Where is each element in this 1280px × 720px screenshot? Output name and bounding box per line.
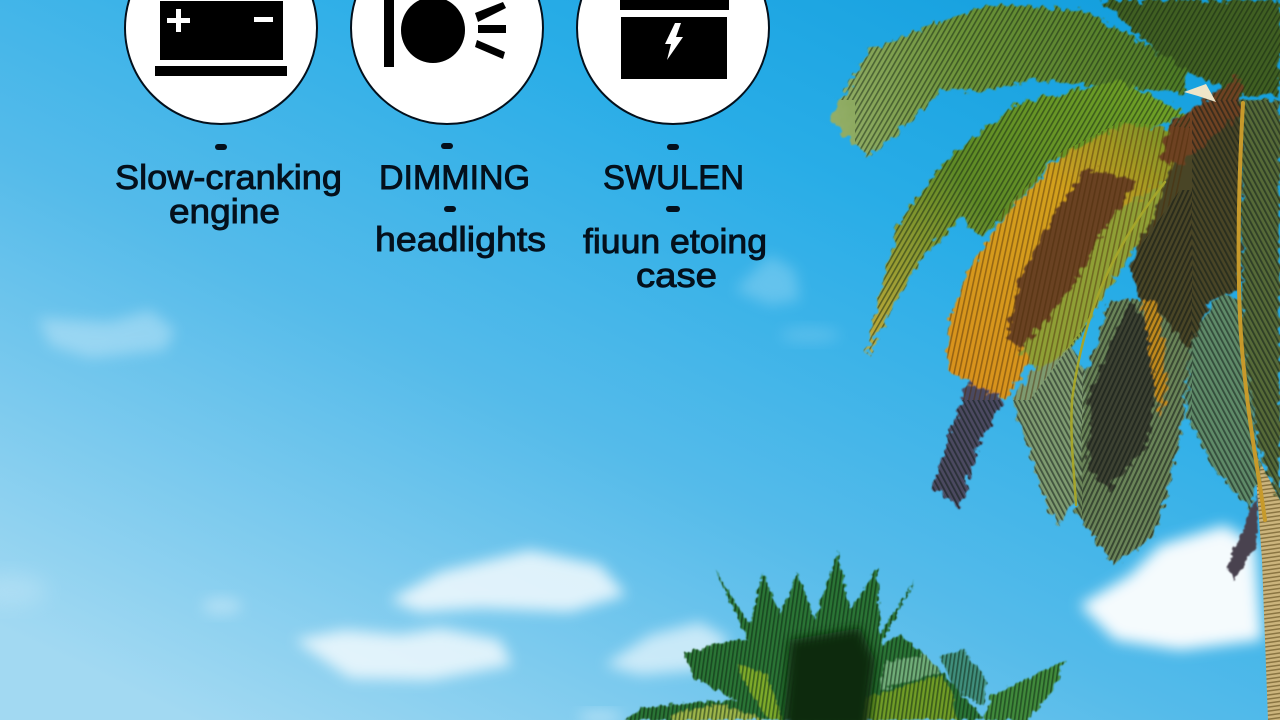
clouds bbox=[0, 255, 1262, 720]
crown stem bbox=[1160, 75, 1240, 165]
label bbox=[583, 223, 767, 295]
symptom: slow-cranking engine bbox=[115, 0, 342, 231]
bullet bbox=[215, 144, 227, 150]
frond: lower lobe A bbox=[1012, 330, 1085, 524]
frond: yellow rib in lower lobe bbox=[1142, 300, 1168, 420]
label: case bbox=[636, 257, 717, 295]
frond: dark drooping bbox=[933, 380, 1002, 509]
small palm textures bbox=[620, 550, 1070, 720]
palm trunk bbox=[1254, 450, 1280, 720]
frond: lower lobe B bbox=[1077, 300, 1190, 566]
palm tree: small, bottom bbox=[625, 553, 1065, 720]
small palm: lime leaf left bbox=[737, 665, 783, 720]
symptom: dimming headlights bbox=[351, 0, 546, 259]
label: headlights bbox=[375, 221, 546, 259]
frond: crown highlight bbox=[1184, 84, 1216, 102]
palm details bbox=[1071, 103, 1265, 520]
main spine bbox=[1239, 103, 1265, 520]
frond: crown bbox=[1100, 0, 1280, 95]
icon: battery in circle bbox=[125, 0, 317, 124]
label: fiuun etoing bbox=[583, 223, 767, 261]
frond: dark centre mass bbox=[1130, 100, 1243, 350]
bullet bbox=[667, 144, 679, 150]
icon: headlight in circle bbox=[351, 0, 543, 124]
frond: right of spine bbox=[1242, 100, 1280, 500]
bullet bbox=[666, 206, 680, 212]
label: engine bbox=[169, 193, 280, 231]
palm fronds: large palm bbox=[829, 0, 1280, 566]
yellow-green midrib bbox=[1071, 182, 1165, 505]
label: SWULEN bbox=[603, 159, 744, 197]
bullet bbox=[441, 143, 453, 149]
frond: second green bbox=[867, 80, 1187, 356]
label bbox=[115, 159, 342, 231]
frond: right lower dark tip bbox=[1227, 494, 1257, 582]
small palm: sky-lit leaf bbox=[880, 655, 940, 690]
frond: yellow-green front bbox=[1020, 178, 1167, 372]
icon: swollen battery in circle bbox=[577, 0, 769, 124]
frond: lower lobe dark heart bbox=[1088, 300, 1160, 490]
palm frond textures bbox=[820, 0, 1280, 570]
frond: yellow bbox=[947, 126, 1183, 398]
small palm: right frond bbox=[985, 660, 1065, 720]
symptom: swollen battery case bbox=[577, 0, 769, 295]
small palm: upright fronds bbox=[625, 553, 985, 720]
frond: right lower bbox=[1186, 290, 1260, 509]
label: DIMMING bbox=[379, 159, 530, 197]
frond: brown shading bbox=[1005, 168, 1135, 350]
frond: top green bbox=[829, 4, 1187, 157]
small palm: teal fan bbox=[940, 650, 987, 705]
small palm: lime leaf bottom bbox=[670, 704, 765, 720]
label: Slow-cranking bbox=[115, 159, 342, 197]
small palm: dark heart bbox=[783, 628, 875, 720]
small palm: lime leaf right bbox=[860, 675, 955, 720]
bullet bbox=[444, 206, 456, 212]
